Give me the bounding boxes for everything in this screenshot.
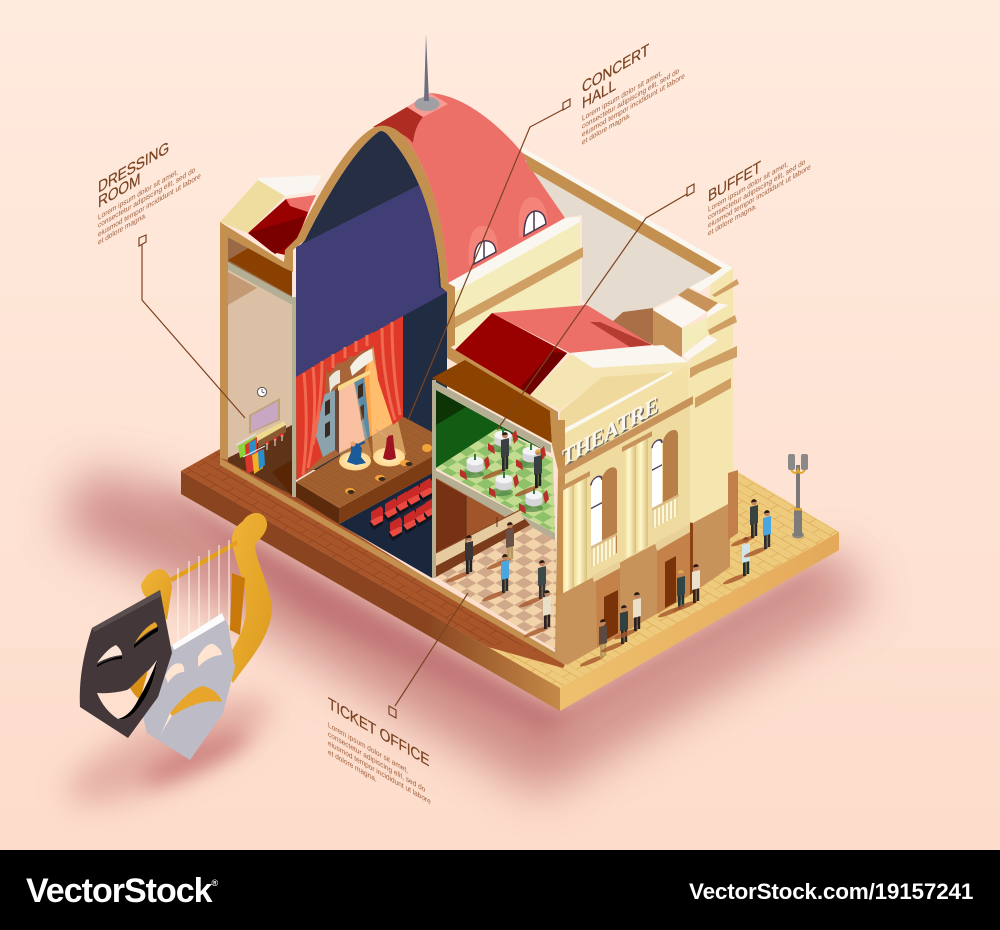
dressing upper: [228, 237, 292, 300]
green floor: [436, 428, 555, 533]
back wall: [436, 478, 555, 577]
navy back wall: [403, 292, 447, 440]
mirror: [249, 398, 280, 434]
roof side cream: [530, 355, 688, 410]
tower ledges: [690, 279, 739, 408]
crossbar: [170, 540, 237, 582]
tables: [460, 428, 549, 514]
right window: [652, 438, 662, 522]
callout: concert hall: Lorem ipsum dolor sit amet,: [582, 68, 662, 123]
lyre left arm: [141, 569, 172, 620]
small recess: [678, 288, 718, 312]
kneeling actor: [347, 441, 366, 465]
spire: [414, 34, 440, 111]
tower side pier: [728, 470, 738, 540]
right columns: [625, 438, 648, 558]
partition wall: [292, 297, 296, 497]
facade elements: [560, 417, 679, 598]
left eye: [97, 645, 122, 663]
callout: buffet: [497, 157, 811, 430]
left columns: [563, 478, 587, 596]
dome interior dark: [296, 131, 447, 470]
audience floor: [339, 473, 432, 578]
light roof: [492, 305, 652, 353]
pink wall: [339, 380, 365, 453]
dressing ceiling: [228, 247, 292, 296]
parapet top: [448, 217, 580, 292]
tower top block: [653, 297, 718, 360]
left wing roof: [220, 175, 322, 256]
dressing wall: [228, 270, 292, 458]
pediment white strip: [558, 371, 672, 437]
right eye: [135, 622, 157, 643]
theatre facade: [530, 268, 739, 665]
mouth: [97, 660, 157, 719]
facade wall: [558, 400, 690, 600]
ticket office people: [445, 522, 551, 639]
brand name: ®: [212, 878, 219, 888]
dressing table: [255, 421, 286, 450]
front low wall: [220, 458, 565, 665]
stage front right: [339, 457, 432, 524]
dome dark red cap: [373, 107, 423, 143]
callout: buffet: Lorem ipsum dolor sit amet,: [708, 159, 788, 214]
callout: concert hall: [408, 41, 685, 420]
buffet guests: [481, 432, 542, 498]
red curtains: [296, 316, 403, 480]
light pools: [339, 448, 405, 470]
right drape: [373, 316, 403, 425]
grey ceiling strip: [432, 380, 551, 453]
outer cut walls: [220, 126, 565, 665]
section wall profile: [220, 126, 455, 460]
right post: [432, 380, 436, 578]
street lamp: [788, 454, 808, 538]
left column caps: [560, 471, 590, 492]
callout: dressing room: consectetur adipiscing elit, sed do: [98, 165, 195, 230]
beam: [432, 360, 552, 443]
singer in red dress: [376, 430, 396, 460]
back wall top white: [520, 146, 733, 268]
purple band: [296, 183, 447, 377]
callout: dressing room: ROOM: [98, 171, 140, 212]
dormer window left: [469, 226, 498, 266]
callout: dressing room: Lorem ipsum dolor sit amet,: [98, 167, 178, 222]
callout: ticket office: Lorem ipsum dolor sit amet,: [328, 720, 408, 775]
spotlight beams: [329, 345, 406, 460]
orange backdrop: [364, 350, 393, 437]
ceiling strip: [228, 262, 292, 305]
image url: VectorStock.com/19157241: [689, 879, 973, 904]
clock: [257, 387, 267, 397]
right column caps: [622, 431, 652, 452]
ground shadow of the building: [60, 470, 868, 795]
callout: buffet: consectetur adipiscing elit, sed do: [708, 157, 805, 222]
callout: dressing room: [98, 139, 245, 418]
dome rear: [373, 93, 565, 285]
tower base: [693, 503, 730, 593]
pediment: [558, 372, 672, 435]
scenery: [315, 350, 393, 457]
checker floor: [436, 524, 556, 650]
brand name: VectorStock: [26, 872, 212, 910]
callout: ticket office: consectetur adipiscing elit, sed do: [328, 729, 425, 794]
left doorway: [596, 568, 620, 648]
callout: concert hall: et dolore magna.: [582, 110, 631, 147]
shadow under lyre and masks: [55, 677, 285, 823]
stage hall: [272, 131, 447, 578]
roof frame: [447, 345, 558, 422]
callout: dressing room: et dolore magna.: [98, 210, 147, 247]
left balcony: [591, 533, 617, 568]
right niche: [663, 427, 678, 516]
left niche: [602, 464, 617, 561]
lower block roof: [447, 305, 652, 422]
theatre sign: THEATRE: [562, 391, 658, 471]
platform side right: [560, 532, 839, 711]
blue wall: [354, 376, 370, 440]
tower rim: [690, 268, 733, 292]
dark mask: [80, 590, 172, 738]
clothes rack: [236, 434, 265, 474]
lyre right arm: [222, 513, 272, 683]
dressing room: [228, 237, 292, 495]
street people: [579, 499, 771, 668]
lyre inner shade: [230, 573, 245, 635]
parapet ledge: [455, 247, 583, 328]
platform: [181, 449, 839, 711]
footlights: [345, 444, 432, 494]
back wall top tan: [523, 153, 722, 275]
auditorium seats: [370, 478, 437, 541]
callout: concert hall: CONCERT: [582, 41, 649, 97]
buffet room: [432, 360, 555, 545]
callout: concert hall: HALL: [582, 76, 616, 113]
slab: [435, 470, 555, 545]
grey mask: [143, 613, 235, 760]
grey house: [315, 390, 335, 457]
right balcony: [652, 494, 679, 529]
callout: buffet: eiusmod tempor incididunt ut labore: [708, 162, 811, 230]
right doorway: [657, 532, 690, 614]
base sills: [592, 561, 620, 582]
left drape: [296, 358, 327, 480]
callout: concert hall: consectetur adipiscing elit, sed do: [582, 66, 679, 131]
callout: ticket office: et dolore magna.: [328, 747, 377, 784]
strings: [178, 540, 229, 650]
facade base: [555, 525, 690, 665]
callout: dressing room: DRESSING: [98, 139, 169, 197]
callout: ticket office: [328, 593, 468, 806]
callout: ticket office: TICKET OFFICE: [328, 695, 429, 771]
corner pier: [550, 413, 565, 665]
lyre: [141, 513, 272, 683]
callout: ticket office: eiusmod tempor incididunt ut labore: [328, 738, 431, 806]
paved ground: [488, 472, 839, 688]
callout: concert hall: eiusmod tempor incididunt ut labore: [582, 71, 685, 139]
platform side left: [181, 471, 560, 711]
building shadow on ground: [488, 640, 565, 668]
frieze: [558, 365, 688, 473]
stage front left: [296, 482, 339, 524]
valance: [327, 332, 373, 374]
shaded inner block: [612, 308, 653, 345]
stage floor: [296, 417, 432, 508]
right tower upper: [688, 268, 733, 527]
parapet wall: [455, 218, 580, 350]
wood floor: [181, 449, 565, 688]
left window: [591, 474, 602, 558]
roof white top: [570, 345, 688, 368]
stage extension under dressing room: [272, 460, 292, 496]
callout: buffet: BUFFET: [708, 158, 761, 206]
counter: [436, 496, 530, 577]
back room inner wall: [525, 160, 712, 322]
tower base dark strip: [688, 522, 693, 596]
dormer window right: [519, 197, 548, 238]
theatre sign: THEATRE: [564, 392, 659, 473]
windows: [325, 399, 330, 416]
callout: buffet: et dolore magna.: [708, 201, 757, 238]
dome top pale: [407, 93, 448, 117]
callout: dressing room: eiusmod tempor incididunt ut labore: [98, 171, 201, 239]
roof shadow: [590, 322, 652, 347]
buffet back wall: [436, 390, 550, 468]
cornice: [558, 396, 693, 478]
watermark band: [0, 850, 1000, 930]
ticket office room: [432, 380, 556, 650]
dark roof: [455, 313, 567, 395]
set backing: [296, 316, 403, 480]
dressing floor: [228, 425, 292, 495]
